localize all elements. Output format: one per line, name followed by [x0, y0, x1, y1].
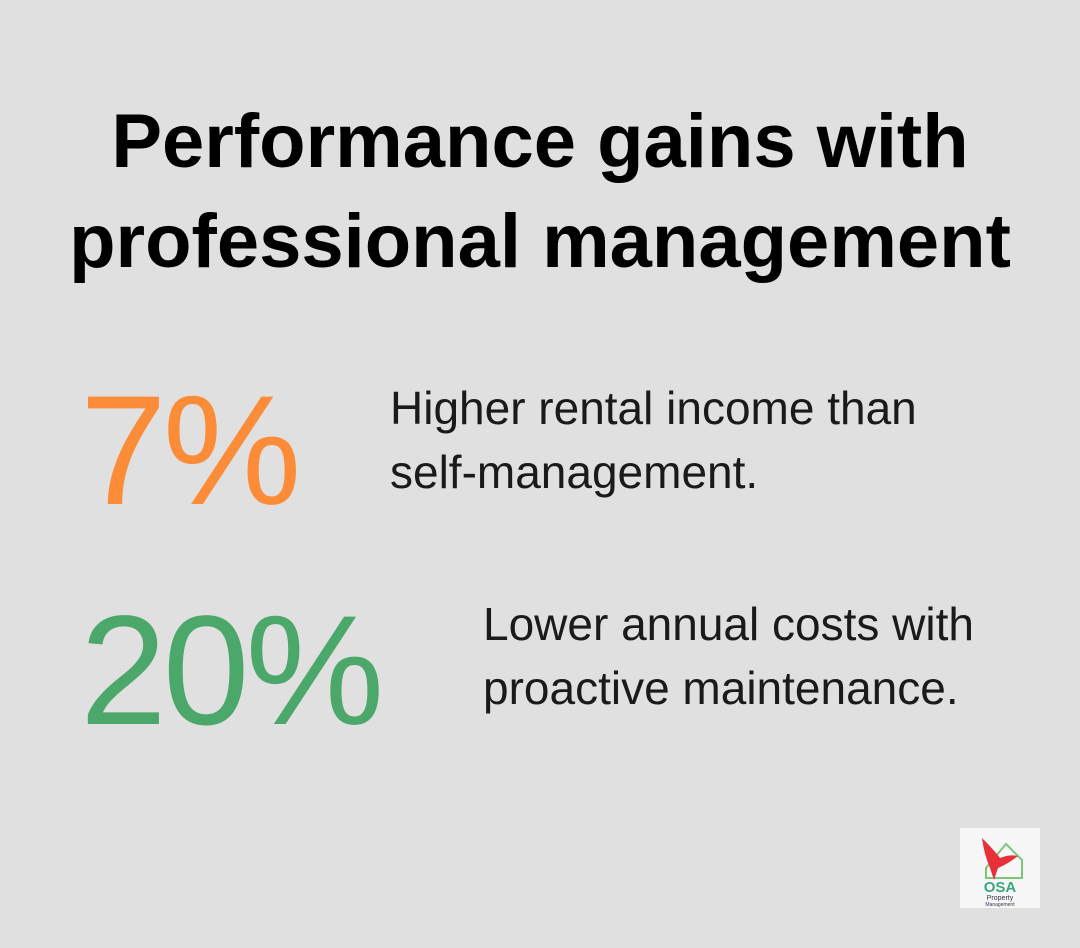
- text: lower annual costs: [483, 598, 974, 714]
- logo: OSA: [984, 879, 1016, 896]
- text: lower annual costs: Lower annual costs with: [483, 598, 974, 650]
- text: higher rental income: Higher rental income than: [390, 382, 917, 434]
- stat: 20%: 20%: [80, 584, 380, 758]
- logo: Property: [987, 895, 1014, 902]
- title: [69, 99, 1011, 284]
- text: higher rental income: [390, 382, 917, 498]
- text: higher rental income: self-management.: [390, 446, 758, 498]
- text: lower annual costs: proactive maintenance.: [483, 662, 959, 714]
- title: Performance gains with: [111, 99, 969, 184]
- logo: [960, 828, 1040, 908]
- title: professional management: [69, 199, 1011, 284]
- stat: 7%: 7%: [80, 364, 297, 538]
- logo: Management: [985, 902, 1015, 908]
